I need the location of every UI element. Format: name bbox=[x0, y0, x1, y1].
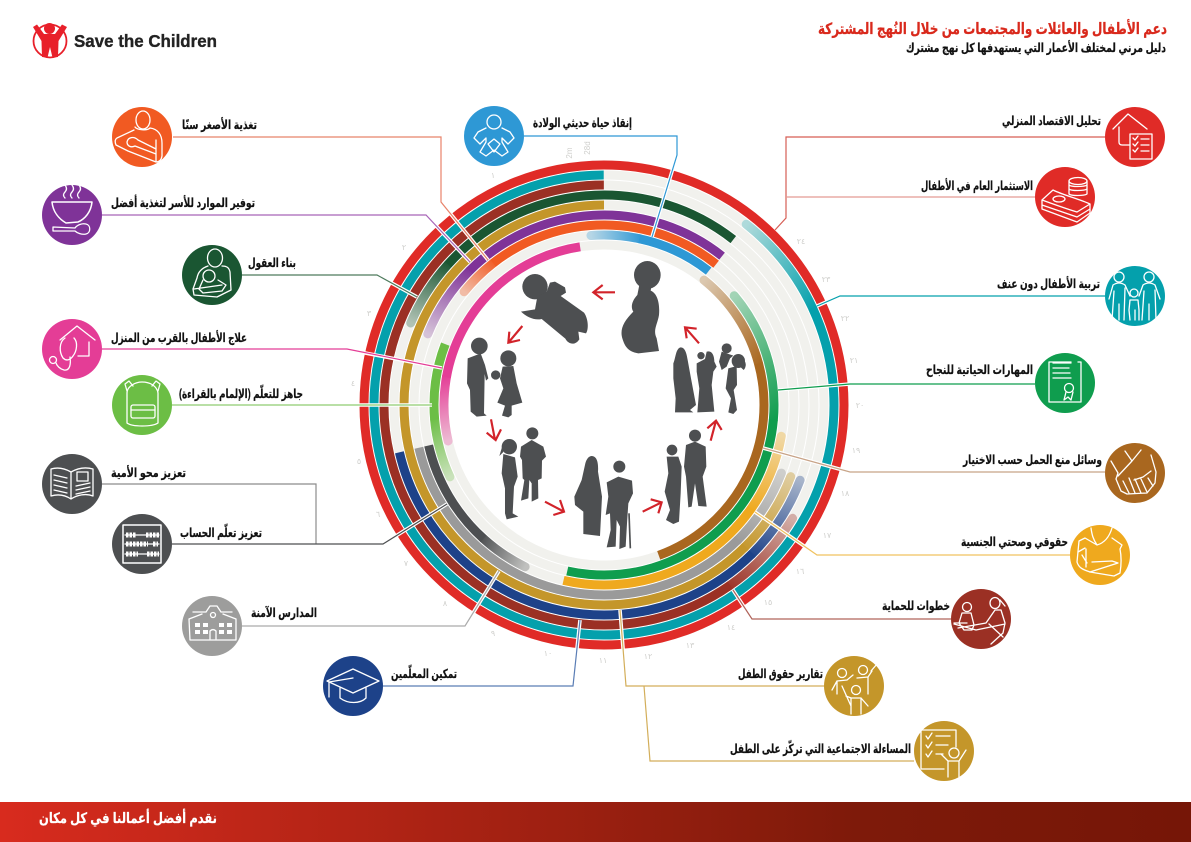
age numbers around ring: ١٥ bbox=[764, 598, 772, 607]
age numbers around ring: ١٣ bbox=[686, 641, 695, 650]
footer bar bbox=[0, 802, 1191, 842]
arrow: adolescent to young adult bbox=[643, 499, 662, 513]
age numbers around ring: ٤ bbox=[351, 379, 355, 388]
icon: two people talking (steps to protection) bbox=[951, 589, 1011, 649]
icon: school building (safe schools) bbox=[182, 596, 242, 656]
ring: red outer bbox=[364, 165, 844, 645]
age numbers around ring: ٩ bbox=[491, 629, 495, 638]
connector lines bbox=[102, 136, 1105, 761]
age numbers around ring: ١٩ bbox=[852, 446, 860, 455]
label: literacy boost: تعزيز محو الأمية bbox=[111, 465, 186, 480]
ring: dark red bbox=[298, 99, 910, 711]
label: child rights reporting: تقارير حقوق الطفل bbox=[738, 667, 823, 681]
ring: green bbox=[364, 165, 844, 645]
label: building brains: بناء العقول bbox=[248, 256, 296, 270]
icon: mother and child (building brains) bbox=[182, 245, 242, 305]
ring: pink bbox=[412, 213, 796, 597]
label: steps to protection: خطوات للحماية bbox=[882, 599, 950, 613]
label: contraception: وسائل منع الحمل حسب الاختيار bbox=[962, 453, 1102, 467]
arrow: young adult to parent bbox=[707, 421, 722, 441]
label: safe schools: المدارس الآمنة bbox=[251, 606, 317, 620]
ring: dark grey bbox=[350, 151, 858, 659]
age numbers around ring: ١٦ bbox=[796, 567, 804, 576]
icon: graduation cap (teachers) bbox=[323, 656, 383, 716]
age numbers around ring: ١١ bbox=[599, 656, 607, 665]
ring: navy bbox=[307, 108, 901, 702]
silhouette: toddlers bbox=[467, 338, 522, 417]
label: life skills: المهارات الحياتية للنجاح bbox=[926, 363, 1033, 377]
connector: social accountability bbox=[644, 686, 914, 761]
age ring chart bbox=[281, 82, 927, 728]
label: care close to home: علاج الأطفال بالقرب من المنزل bbox=[111, 330, 247, 345]
connector: steps to protection bbox=[733, 590, 951, 619]
connector: child rights reporting bbox=[620, 610, 825, 686]
ring: yellow bbox=[353, 154, 855, 656]
connector: public investment bbox=[786, 196, 1035, 198]
label: household nutrition: توفير الموارد للأسر لتغذية أفضل bbox=[111, 194, 255, 210]
icon: clasped hands (contraceptive choice) bbox=[1105, 443, 1165, 503]
icon: house and checklist (household economy) bbox=[1105, 107, 1165, 167]
age numbers around ring: ١٤ bbox=[727, 623, 735, 632]
silhouette: pregnant woman bbox=[622, 261, 661, 353]
label: ready to learn: جاهز للتعلّم (الإلمام بالقراءة) bbox=[179, 384, 303, 402]
age numbers around ring: ٢٣ bbox=[822, 275, 831, 284]
age numbers around ring: ٨ bbox=[443, 599, 448, 608]
connector: numeracy boost bbox=[172, 504, 447, 544]
icon: certificate (life skills) bbox=[1035, 353, 1095, 413]
connector: teachers bbox=[383, 620, 580, 686]
age numbers around ring: ٣ bbox=[367, 309, 372, 318]
footer bar: نقدم أفضل أعمالنا في كل مكان bbox=[39, 809, 217, 827]
silhouette: school children bbox=[499, 427, 546, 519]
label: teachers: تمكين المعلّمين bbox=[391, 664, 457, 681]
silhouette: adolescents with disability bbox=[574, 456, 633, 549]
connector: youngest nutrition bbox=[173, 137, 488, 260]
ring: light green bbox=[378, 179, 830, 631]
age numbers around ring: ١٠ bbox=[544, 649, 552, 658]
age numbers around ring: ٢٠ bbox=[856, 401, 864, 410]
age numbers around ring: ٢ bbox=[402, 243, 406, 252]
ring: grey bbox=[335, 136, 873, 674]
icon: children with raised arms (child rights reporting) bbox=[824, 656, 884, 716]
icon: abacus (numeracy boost) bbox=[112, 514, 172, 574]
arrow: toddler to school age bbox=[487, 419, 501, 440]
label: public investment: الاستثمار العام في الأطفال bbox=[921, 178, 1033, 194]
ring: orange bbox=[351, 152, 857, 658]
label: numeracy boost: تعزيز تعلّم الحساب bbox=[180, 523, 262, 540]
arrow: school age to adolescent bbox=[545, 500, 564, 515]
icon: newborn baby bbox=[464, 106, 524, 166]
life-cycle silhouettes bbox=[467, 261, 746, 549]
logo: Save the Children bbox=[33, 23, 217, 58]
icon: bowl and spoon (household nutrition) bbox=[42, 185, 102, 245]
age numbers around ring: ٦ bbox=[376, 510, 380, 519]
icon: crossed arms (sexual health) bbox=[1070, 525, 1130, 585]
label: household economy: تحليل الاقتصاد المنزلي bbox=[1002, 114, 1101, 128]
connector: household economy bbox=[775, 137, 1105, 230]
silhouette: young adults bbox=[665, 430, 707, 524]
age numbers around ring: 2m bbox=[565, 147, 574, 159]
age numbers around ring: ٧ bbox=[404, 559, 409, 568]
age numbers around ring: ٢٤ bbox=[797, 237, 805, 246]
age numbers around ring: ١٨ bbox=[841, 489, 850, 498]
icon: coins and banknotes (public investment) bbox=[1035, 167, 1095, 227]
connector: parenting without violence bbox=[817, 296, 1105, 306]
icon: family holding hands (parenting without violence) bbox=[1105, 266, 1165, 326]
connector: ready to learn bbox=[172, 403, 432, 407]
age numbers around ring: ٥ bbox=[357, 457, 361, 466]
connector: literacy boost bbox=[102, 484, 316, 544]
silhouette: baby bbox=[521, 274, 588, 344]
label: social accountability: المساءلة الاجتماعية التي تركّز على الطفل bbox=[730, 740, 911, 756]
icon: checklist and child (social accountability) bbox=[914, 721, 974, 781]
label: youngest nutrition: تغذية الأصغر سنًا bbox=[182, 117, 257, 132]
connector: building brains bbox=[242, 275, 417, 297]
ring: sky blue bbox=[402, 203, 806, 607]
label: newborn: إنقاذ حياة حديثي الولادة bbox=[533, 116, 632, 130]
icon: nursing mother (youngest nutrition) bbox=[112, 107, 172, 167]
age numbers around ring: ٢١ bbox=[850, 356, 858, 365]
age numbers around ring: 28d bbox=[583, 141, 592, 155]
connector: safe schools bbox=[242, 571, 499, 626]
icon: backpack (ready to learn) bbox=[112, 375, 172, 435]
connector: life skills bbox=[778, 384, 1035, 390]
age numbers around ring: ١٢ bbox=[644, 652, 652, 661]
arrow: parent to pregnancy bbox=[685, 327, 699, 343]
age numbers around ring bbox=[351, 141, 864, 665]
ring: dark green bbox=[307, 108, 901, 702]
connector: contraception bbox=[763, 448, 1105, 472]
icon: home and stethoscope (care close to home) bbox=[42, 319, 102, 379]
background rings bbox=[374, 175, 834, 635]
silhouette: mothers with children bbox=[673, 343, 746, 414]
icon: open book (literacy boost) bbox=[42, 454, 102, 514]
connector: newborn bbox=[524, 136, 677, 237]
label: sexual health: حقوقي وصحتي الجنسية bbox=[961, 535, 1068, 549]
age numbers around ring: ٢٢ bbox=[841, 314, 849, 323]
age numbers around ring: ١٧ bbox=[823, 531, 832, 540]
connector: sexual health bbox=[755, 512, 1070, 555]
arrow: infant to toddler bbox=[508, 326, 522, 343]
connector: household nutrition bbox=[102, 215, 470, 262]
connector: community case management bbox=[102, 349, 442, 368]
ring: gold bbox=[321, 122, 887, 688]
ring: brown bbox=[379, 180, 829, 630]
label: parenting without violence: تربية الأطفال دون عنف bbox=[997, 276, 1100, 291]
ring: purple bbox=[335, 136, 873, 674]
age numbers around ring: ١ bbox=[491, 171, 495, 180]
arrow: pregnancy to infant bbox=[593, 285, 615, 299]
life-cycle arrows bbox=[487, 285, 722, 515]
ring: teal bbox=[281, 82, 927, 728]
logo: Save the Children: Save the Children bbox=[74, 31, 217, 51]
